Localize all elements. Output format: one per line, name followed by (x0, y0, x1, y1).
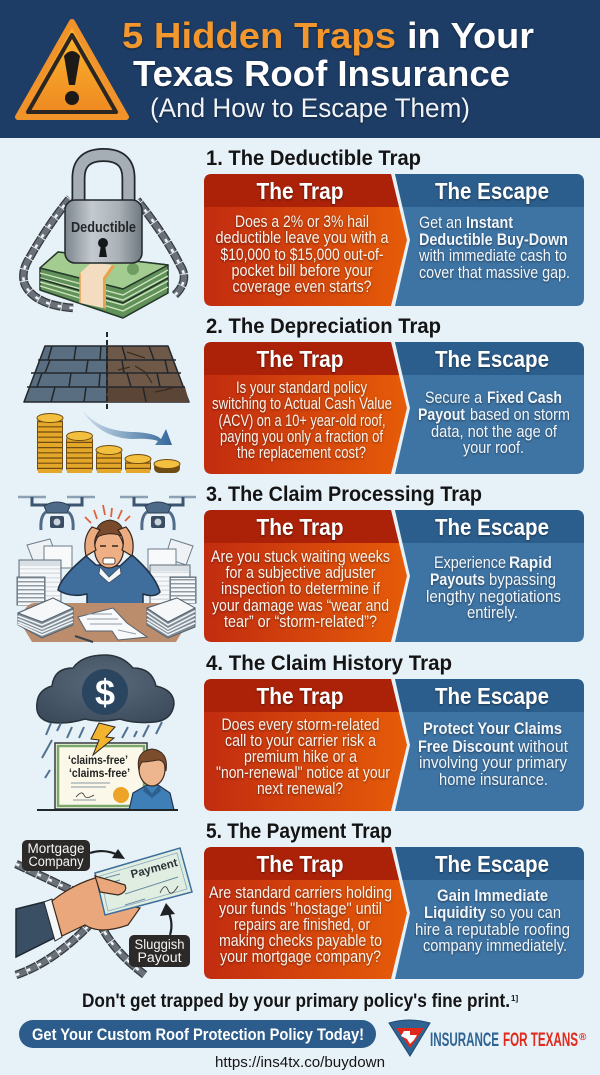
section 5: payment trap (16, 820, 584, 979)
trap and escape panel: hire a reputable roofing (415, 921, 570, 939)
trap and escape panel: Free Discount (418, 738, 514, 756)
icon: warning triangle (18, 22, 126, 117)
trap and escape panel (204, 679, 584, 811)
illustration: stressed man among paperwork (17, 505, 196, 642)
section 4: claim history trap (37, 652, 584, 811)
trap and escape panel: The Trap (256, 851, 344, 877)
trap and escape panel: The Escape (435, 514, 549, 540)
trap and escape panel (204, 510, 584, 642)
trap and escape panel: $10,000 to $15,000 out-of- (220, 246, 384, 264)
trap and escape panel: Fixed Cash (487, 389, 562, 407)
section 2: depreciation trap (24, 315, 584, 474)
trap and escape panel: your mortgage company? (220, 948, 381, 966)
trap and escape panel: pocket bill before your (232, 262, 373, 280)
trap and escape panel: without (517, 738, 568, 756)
label: mortgage company (22, 840, 125, 871)
heading: 3. The Claim Processing Trap (206, 483, 482, 506)
illustration: chained hand holding a check: Payment (130, 857, 179, 881)
trap and escape panel: paying you only a fraction of (220, 428, 383, 446)
trap and escape panel: Are you stuck waiting weeks (211, 548, 390, 566)
trap and escape panel: inspection to determine if (221, 580, 380, 598)
illustration: shrinking coin stacks and down arrow (37, 410, 180, 473)
trap and escape panel: the replacement cost? (237, 444, 366, 462)
illustration: storm cloud, certificate and homeowner (37, 655, 178, 810)
trap and escape panel: Does every storm-related (222, 716, 380, 734)
label: sluggish payout (129, 903, 190, 967)
illustration: chained hand holding a check (16, 840, 192, 975)
trap and escape panel: The Escape (435, 851, 549, 877)
trap and escape panel: company immediately. (423, 937, 567, 955)
trap and escape panel: home insurance. (439, 771, 548, 789)
heading: 2. The Depreciation Trap (206, 315, 441, 338)
trap and escape panel (204, 174, 584, 306)
trap and escape panel: Is your standard policy (236, 379, 368, 397)
trap and escape panel: (ACV) on a 10+ year-old roof, (218, 412, 386, 430)
trap and escape panel: for a subjective adjuster (226, 564, 376, 582)
trap and escape panel: repairs are finished, or (234, 916, 370, 934)
title: in Your (407, 15, 534, 56)
trap and escape panel: lengthy negotiations (426, 588, 561, 606)
trap and escape panel: Secure a (425, 389, 483, 407)
heading: 4. The Claim History Trap (206, 652, 452, 675)
trap and escape panel: coverage even starts? (232, 278, 372, 296)
trap and escape panel (204, 847, 584, 979)
trap and escape panel: Rapid (509, 554, 552, 572)
trap and escape panel: Protect Your Claims (423, 720, 562, 738)
illustration: padlock, chains and cash: Deductible (71, 219, 136, 236)
illustration: drones (18, 497, 196, 530)
footer note: Don't get trapped by your primary policy's fine print. (82, 991, 510, 1012)
trap and escape panel: data, not the age of (431, 423, 557, 441)
title: (And How to Escape Them) (150, 93, 470, 123)
trap and escape panel: Does a 2% or 3% hail (235, 213, 369, 231)
label: mortgage company: Company (28, 854, 84, 869)
illustration: half-worn roof (24, 332, 189, 412)
heading: 1. The Deductible Trap (206, 147, 421, 170)
trap and escape panel: your funds "hostage" until (219, 900, 382, 918)
title: 5 Hidden Traps (122, 15, 396, 56)
trap and escape panel: Experience (434, 554, 506, 572)
trap and escape panel: deductible leave you with a (216, 229, 389, 247)
trap and escape panel: involving your primary (419, 754, 568, 772)
trap and escape panel: your damage was “wear and (212, 597, 389, 615)
trap and escape panel: Are standard carriers holding (209, 884, 392, 902)
trap and escape panel: The Trap (256, 683, 344, 709)
trap and escape panel: The Trap (256, 514, 344, 540)
trap and escape panel: switching to Actual Cash Value (212, 395, 392, 413)
illustration: storm cloud, certificate and homeowner: ‘claims-free’ (69, 766, 130, 780)
header banner (0, 0, 600, 138)
trap and escape panel: making checks payable to (219, 932, 382, 950)
trap and escape panel: your roof. (463, 439, 524, 457)
trap and escape panel: Payout (418, 406, 465, 424)
trap and escape panel: The Escape (435, 683, 549, 709)
trap and escape panel: The Trap (256, 178, 344, 204)
trap and escape panel: "non-renewal" notice at your (216, 764, 390, 782)
trap and escape panel: The Escape (435, 178, 549, 204)
trap and escape panel: premium hike or a (244, 748, 358, 766)
trap and escape panel: cover that massive gap. (419, 264, 570, 282)
trap and escape panel: Get an (419, 214, 462, 232)
footer note: 1] (511, 994, 518, 1003)
trap and escape panel: Liquidity (424, 904, 487, 922)
trap and escape panel: Payouts (430, 571, 485, 589)
label: sluggish payout: Payout (138, 950, 182, 965)
trap and escape panel: The Escape (435, 346, 549, 372)
trap and escape panel: next renewal? (257, 780, 343, 798)
trap and escape panel: based on storm (470, 406, 570, 424)
section 3: claim processing trap (17, 483, 584, 642)
trap and escape panel: call to your carrier risk a (225, 732, 377, 750)
label: mortgage company: Mortgage (28, 841, 84, 856)
trap and escape panel: tear” or “storm-related”? (224, 613, 377, 631)
trap and escape panel: so you can (490, 904, 561, 922)
illustration: padlock, chains and cash (23, 155, 184, 318)
trap and escape panel: The Trap (256, 346, 344, 372)
trap and escape panel (204, 342, 584, 474)
section 1: deductible trap (23, 147, 584, 318)
heading: 5. The Payment Trap (206, 820, 392, 843)
illustration: storm cloud, certificate and homeowner: $ (95, 672, 115, 713)
logo: Insurance for Texans (389, 1020, 587, 1056)
logo: Insurance for Texans: INSURANCE (430, 1030, 499, 1051)
trap and escape panel: with immediate cash to (418, 247, 567, 265)
illustration: storm cloud, certificate and homeowner: ‘claims-free’ (68, 753, 128, 767)
trap and escape panel: Instant (466, 214, 513, 232)
title (122, 15, 534, 123)
trap and escape panel: bypassing (489, 571, 556, 589)
logo: Insurance for Texans: ® (579, 1032, 587, 1043)
title: Texas Roof Insurance (133, 53, 510, 94)
call-to-action button: Get Your Custom Roof Protection Policy Today! (32, 1025, 364, 1044)
trap and escape panel: entirely. (467, 604, 518, 622)
label: sluggish payout: Sluggish (134, 937, 184, 952)
trap and escape panel: Deductible Buy-Down (419, 231, 568, 249)
trap and escape panel: Gain Immediate (437, 887, 548, 905)
url: https://ins4tx.co/buydown (215, 1054, 385, 1071)
call-to-action button (19, 1020, 376, 1048)
